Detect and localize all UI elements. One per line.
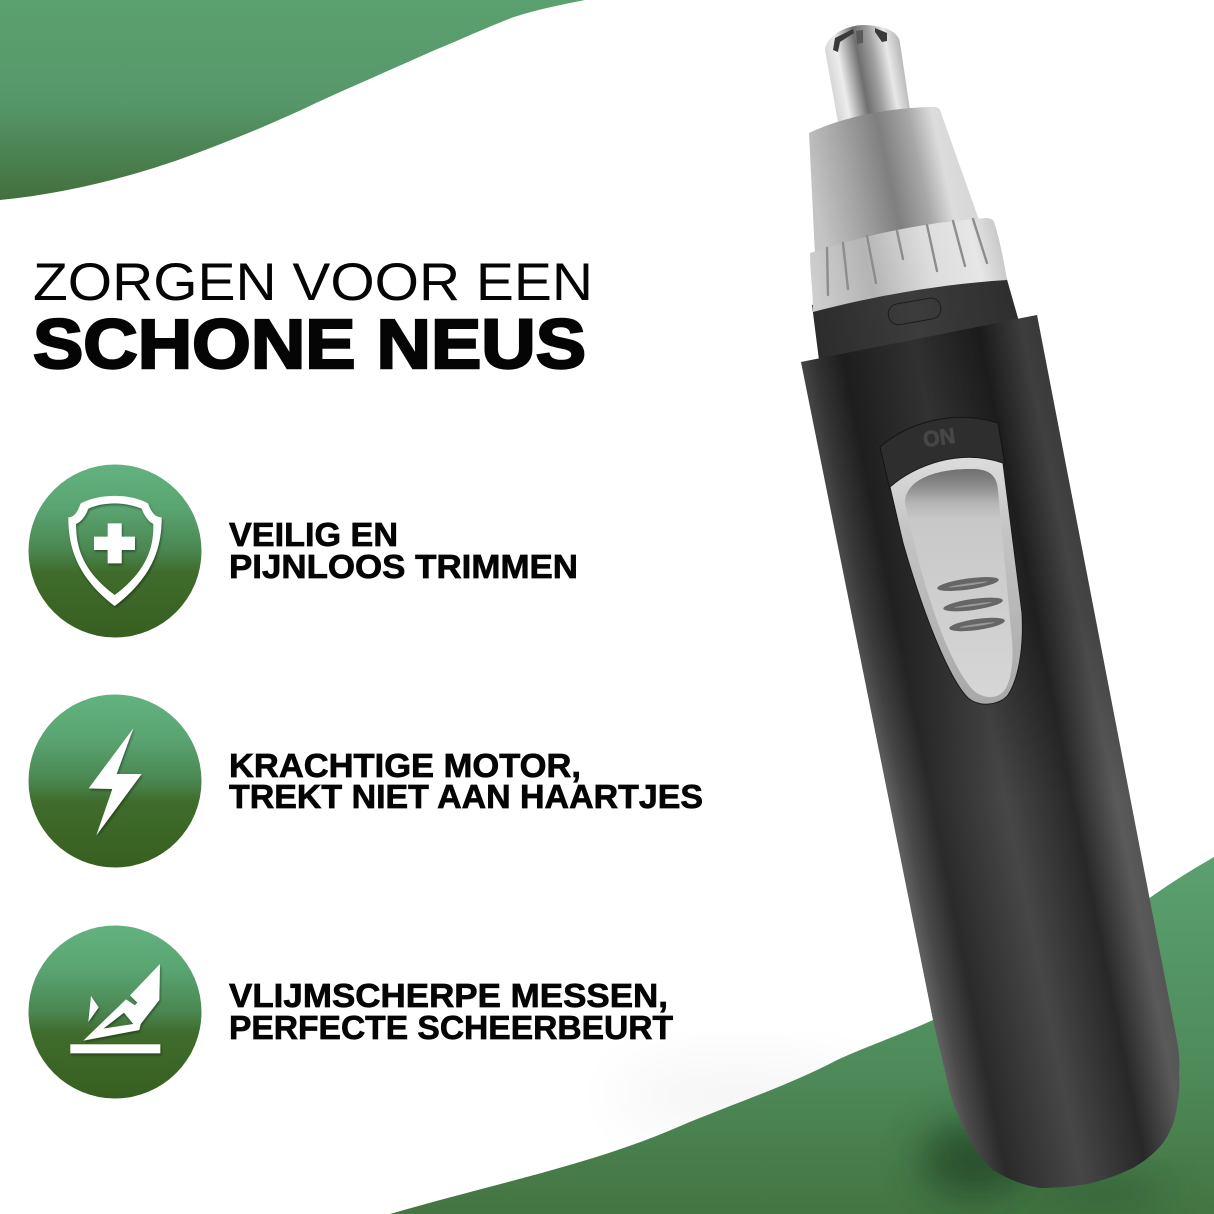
silver slide switch [890, 457, 1022, 704]
product: nose trimmer [801, 25, 1179, 1188]
switch grip ridges [937, 574, 1006, 634]
icon: lightning bolt [28, 694, 202, 868]
top green wave [0, 0, 585, 200]
trimmer body [801, 315, 1179, 1188]
trimmer stem [825, 25, 910, 122]
feature: safe trimming [28, 464, 578, 638]
trimmer neck [812, 276, 1020, 368]
feature text: safe trimming: PIJNLOOS TRIMMEN [229, 548, 578, 585]
feature text: sharp blades: VLIJMSCHERPE MESSEN, [229, 977, 668, 1014]
title: SCHONE NEUS [33, 305, 586, 383]
icon: shield with cross [28, 464, 202, 638]
switch housing [880, 417, 1005, 490]
title: ZORGEN VOOR EEN [33, 253, 593, 312]
feature text: sharp blades: PERFECTE SCHEERBEURT [229, 1009, 673, 1046]
icon: blade on line [28, 926, 202, 1098]
feature text: safe trimming: VEILIG EN [229, 516, 398, 553]
bottom green wave [390, 857, 1214, 1214]
feature: powerful motor [28, 694, 703, 868]
trimmer cone [809, 107, 979, 255]
feature: sharp blades [28, 926, 677, 1098]
feature text: powerful motor: KRACHTIGE MOTOR, [229, 747, 581, 784]
soft floor shadow on white [610, 1060, 870, 1130]
on label: ON [921, 423, 957, 452]
adjustment ring [810, 218, 1007, 312]
feature text: powerful motor: TREKT NIET AAN HAARTJES [229, 778, 703, 815]
title [33, 253, 593, 383]
